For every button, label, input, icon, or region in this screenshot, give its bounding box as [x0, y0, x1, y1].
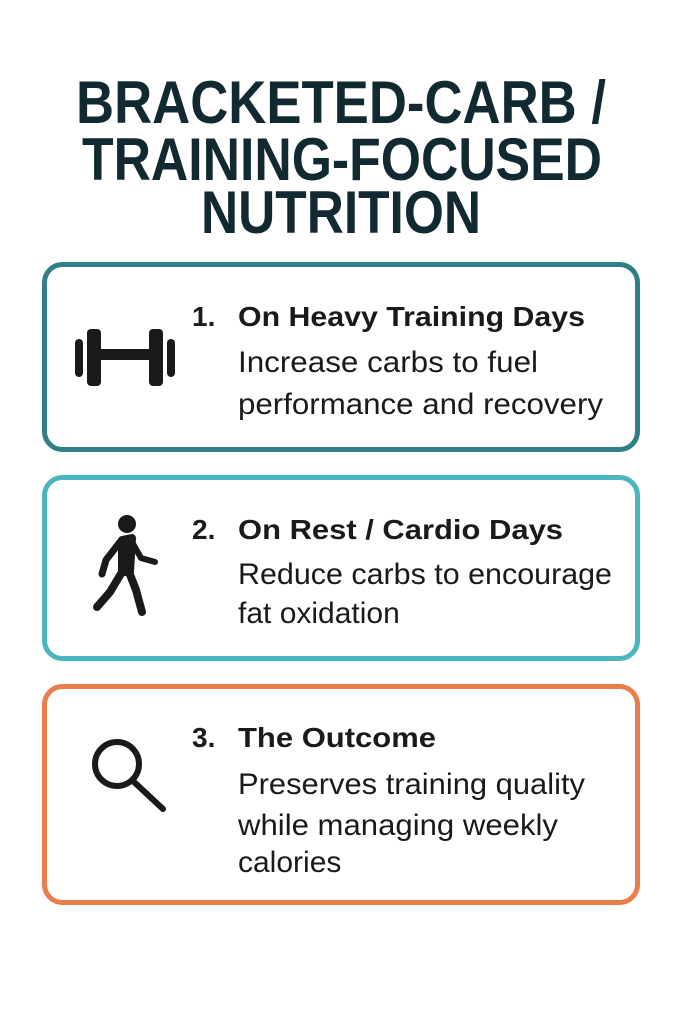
- body 3: calories: [238, 846, 341, 879]
- body 3: while managing weekly: [237, 809, 558, 842]
- icon: magnifier: [95, 742, 163, 809]
- title: [76, 69, 606, 246]
- panel: outcome: [44, 686, 638, 902]
- body 2: Reduce carbs to encourage: [238, 558, 612, 591]
- heading 2: On Rest / Cardio Days: [238, 514, 563, 545]
- panel: rest / cardio days: [44, 478, 638, 658]
- icon: dumbbell: [75, 329, 175, 386]
- heading 1: 1.: [192, 301, 215, 332]
- title: BRACKETED-CARB /: [76, 69, 606, 136]
- title: TRAINING-FOCUSED: [82, 126, 602, 193]
- body 1: [238, 346, 603, 421]
- heading 1: On Heavy Training Days: [238, 301, 585, 332]
- heading 3: The Outcome: [238, 722, 436, 753]
- body 1: performance and recovery: [238, 388, 603, 421]
- body 3: [237, 768, 585, 879]
- heading 3: 3.: [192, 722, 215, 753]
- heading 2: 2.: [192, 514, 215, 545]
- panel: heavy training days: [44, 264, 638, 450]
- icon: walking person: [97, 515, 155, 612]
- body 1: Increase carbs to fuel: [238, 346, 538, 379]
- body 2: [238, 558, 612, 630]
- body 3: Preserves training quality: [238, 768, 585, 801]
- body 2: fat oxidation: [238, 597, 400, 630]
- title: NUTRITION: [201, 179, 481, 246]
